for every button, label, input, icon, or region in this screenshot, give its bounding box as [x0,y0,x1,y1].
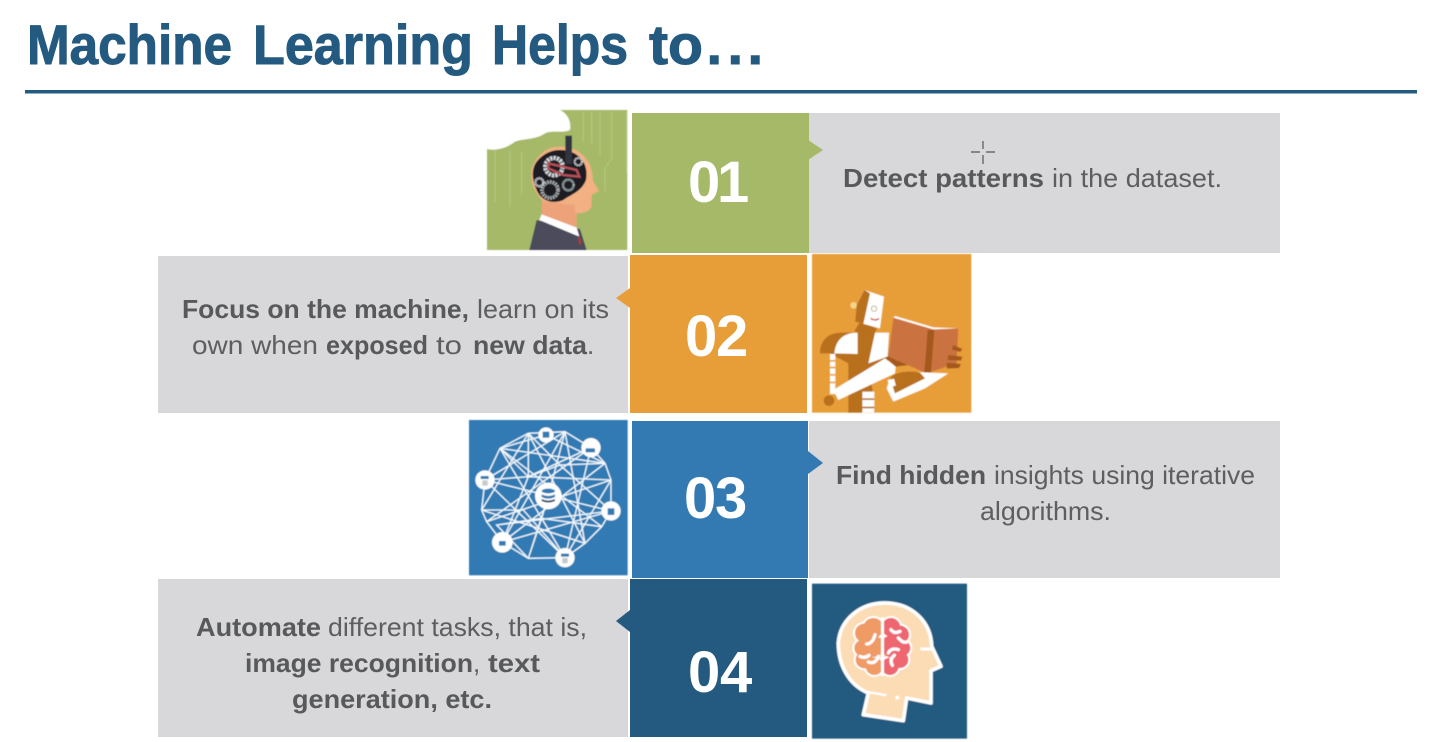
notch 01 [808,140,823,160]
text 02: new data [473,330,588,360]
text panel 02 [158,256,628,413]
icon: head with gears [487,110,627,250]
text 04: image recognition [245,648,473,678]
title: to [649,13,703,76]
panel: row 04 [158,579,967,739]
icon: robot reading a book [812,254,971,413]
notch 02 [616,288,630,308]
text 01: in the dataset. [1052,163,1222,193]
number box 01 [632,113,809,253]
icon: head with brain [812,584,967,739]
title rule [25,90,1417,94]
text 01 [843,163,1222,193]
text 02: own when [192,330,318,360]
text panel 03 [809,421,1280,578]
number box 04 [630,579,807,737]
number 04: 04 [688,640,752,705]
number 02: 02 [685,304,748,369]
text 03: insights using iterative [994,460,1255,490]
text 02: learn on its [477,294,609,324]
notch 04 [616,610,630,632]
icon: data network [469,420,628,575]
number 03: 03 [684,466,747,531]
text 04: text [488,648,540,678]
text 04: generation, etc. [292,684,492,714]
title: Machine [27,13,232,76]
number box 02 [630,255,807,413]
panel: row 02 [158,254,971,413]
title: ... [706,13,763,76]
text 01: Detect patterns [843,163,1044,193]
panel: row 03 [469,420,1280,578]
panel: row 01 [487,110,1280,253]
text 03: Find hidden [836,460,986,490]
notch 03 [808,451,823,474]
text 02: to [436,330,462,360]
text 04: different tasks, that is, [328,612,587,642]
text 02: Focus on the machine, [182,294,469,324]
text panel 01 [809,113,1280,253]
text 04 [196,612,587,714]
title: Helps [492,13,628,76]
title [27,13,763,76]
title: Learning [253,13,473,76]
text panel 04 [158,579,628,737]
text 02: exposed [326,330,428,360]
number 01: 01 [688,150,749,215]
text 03 [836,460,1255,526]
text 04: Automate [196,612,321,642]
icon: cursor crosshair [971,141,995,164]
text 02 [182,294,609,360]
text 04: , [473,648,480,678]
text 02: . [587,330,594,360]
text 03: algorithms. [980,496,1111,526]
number box 03 [632,421,808,578]
